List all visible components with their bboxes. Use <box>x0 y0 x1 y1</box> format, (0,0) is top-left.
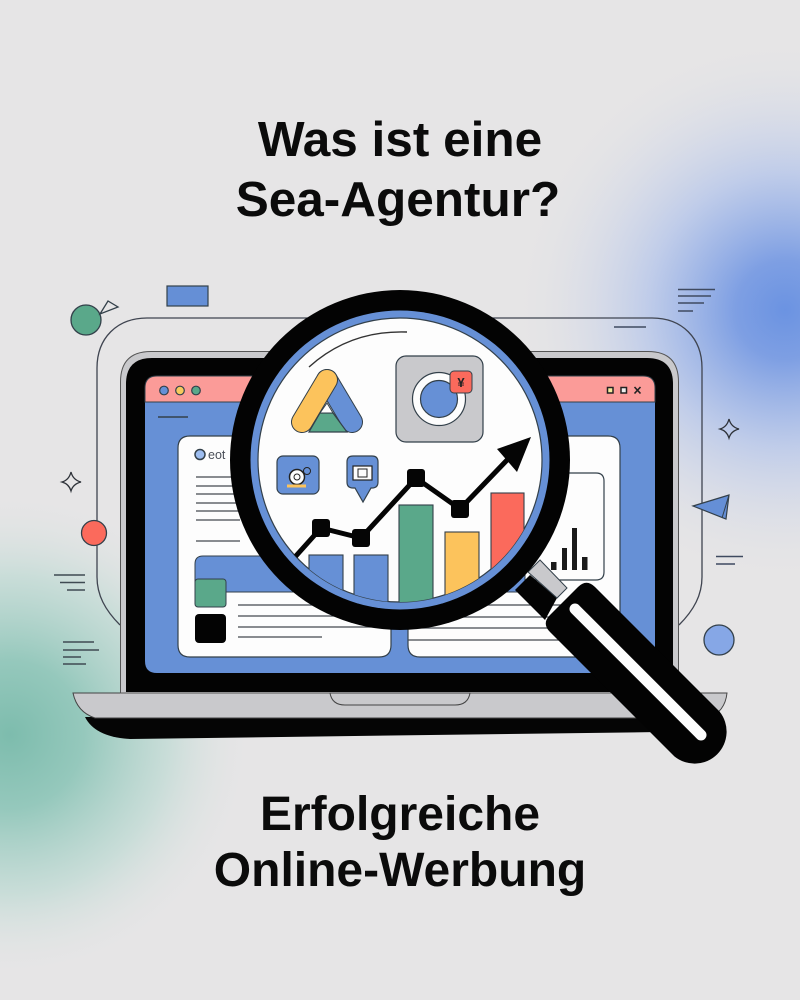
line: above laptop <box>614 326 646 328</box>
right content panel <box>408 436 620 657</box>
lines: right <box>716 556 743 564</box>
icon: blue circle <box>704 625 734 655</box>
title: Was ist eine <box>258 112 542 167</box>
icon: blue rectangle <box>167 286 208 306</box>
inner right card <box>480 473 604 580</box>
screen <box>145 376 655 673</box>
icon: gray tile with ring and badge <box>396 356 483 442</box>
icon: location pin <box>347 456 378 502</box>
window dots left <box>160 386 200 395</box>
panel lines <box>238 605 570 640</box>
lens glass <box>258 318 542 602</box>
laptop <box>73 352 727 739</box>
window controls right <box>608 387 640 394</box>
browser title bar <box>145 376 655 402</box>
black tile <box>195 614 226 643</box>
handle neck <box>515 575 557 620</box>
icon: left sparkle <box>62 472 81 491</box>
title: Sea-Agentur? <box>236 172 560 227</box>
laptop bezel <box>126 358 673 692</box>
trend line with arrow <box>295 437 531 557</box>
lens glare <box>309 332 407 367</box>
subtitle <box>214 788 586 897</box>
laptop outline backdrop <box>97 318 702 625</box>
bar chart <box>308 492 525 602</box>
icon: paper plane <box>693 495 729 519</box>
icon: blue tile <box>277 456 319 494</box>
text lines <box>196 477 240 541</box>
icon: red circle <box>82 520 106 546</box>
screen line <box>158 416 188 418</box>
laptop base <box>73 693 727 718</box>
left content panel <box>178 436 391 657</box>
icon: green circle with pointer <box>71 301 118 335</box>
icon: right sparkle <box>720 419 739 438</box>
lens frame <box>230 290 570 630</box>
blue banner <box>195 556 525 592</box>
lens ring <box>250 310 550 610</box>
laptop notch <box>330 693 470 705</box>
title <box>236 112 560 227</box>
lines: top right <box>678 290 715 311</box>
handle highlight <box>575 609 701 735</box>
search logo: eot <box>208 448 226 462</box>
mini bar chart <box>551 528 588 570</box>
laptop lid <box>120 352 678 693</box>
green tile <box>195 579 226 607</box>
magnifying glass <box>230 290 727 764</box>
handle <box>546 583 727 764</box>
icon: gray tile with ring and badge: ¥ <box>457 375 465 390</box>
subtitle: Online-Werbung <box>214 844 586 897</box>
search logo <box>195 448 226 462</box>
lines: left upper <box>54 575 85 590</box>
lens content <box>277 332 531 625</box>
subtitle: Erfolgreiche <box>260 788 540 841</box>
laptop base shadow <box>85 717 660 739</box>
icon: ads triangle logo <box>302 380 352 432</box>
lines: left lower <box>63 642 99 664</box>
handle collar <box>528 560 567 598</box>
